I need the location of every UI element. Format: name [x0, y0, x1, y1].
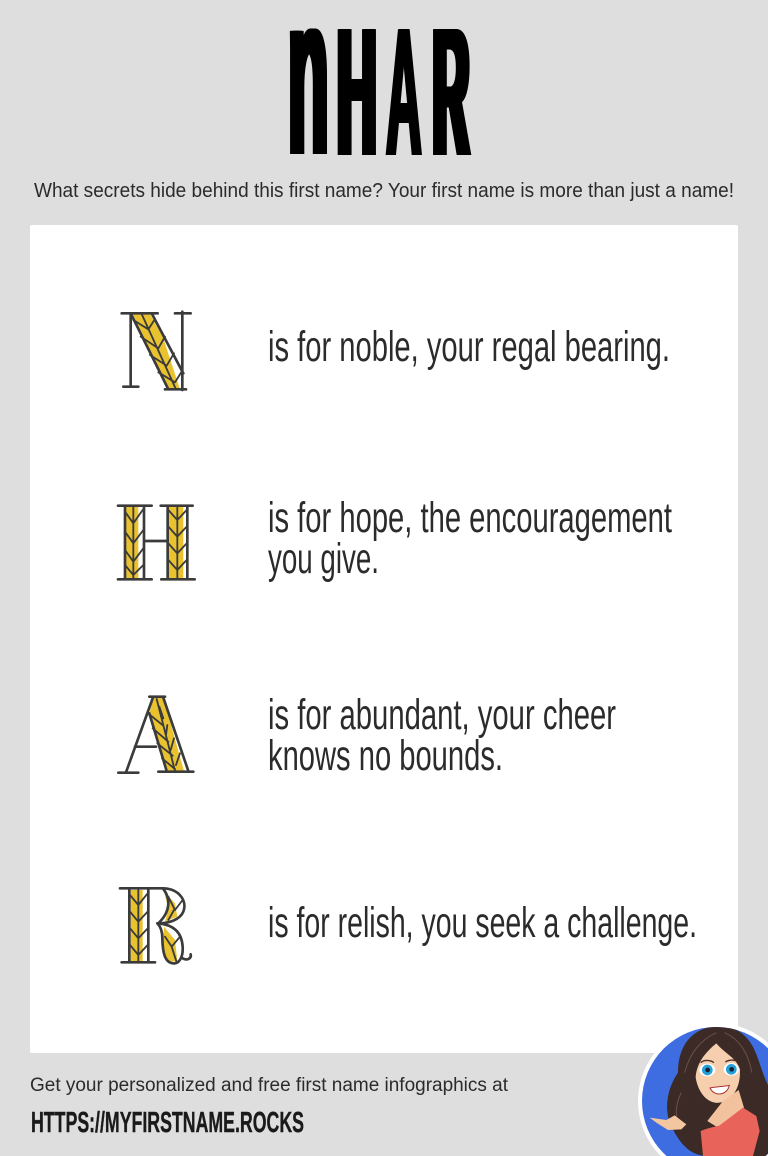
avatar ring: [638, 1023, 768, 1156]
icon: wheat letter N: [122, 312, 191, 390]
footer url: HTTPS://MYFIRSTNAME.ROCKS: [31, 1107, 304, 1139]
icon: wheat letter R: [120, 888, 191, 963]
row: letter N: [122, 312, 670, 390]
row: letter H: [118, 494, 672, 583]
title: [288, 0, 472, 204]
avatar: [638, 1023, 768, 1156]
tagline: What secrets hide behind this first name? Your first name is more than just a name!: [34, 180, 734, 202]
icon: wheat letter H: [118, 506, 195, 579]
row: letter R: [120, 888, 697, 963]
icon: wheat letter A: [118, 697, 193, 773]
text: A lines: knows no bounds.: [268, 732, 503, 780]
text: H lines: you give.: [268, 535, 379, 583]
text: A lines: [268, 691, 616, 780]
panel: letter meanings: [30, 225, 738, 1053]
footer text: Get your personalized and free first name infographics at: [30, 1075, 509, 1096]
text: H lines: [268, 494, 672, 583]
avatar figure: [650, 1026, 768, 1156]
avatar background: [642, 1027, 768, 1156]
row: letter A: [118, 691, 616, 780]
text: A lines: is for abundant, your cheer: [268, 691, 616, 739]
